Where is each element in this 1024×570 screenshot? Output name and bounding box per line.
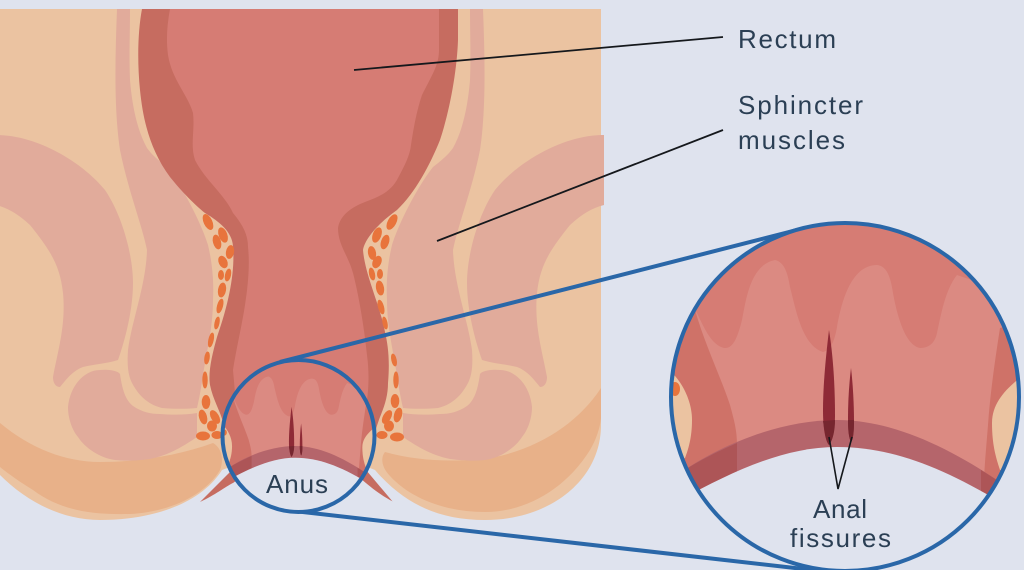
- tissue: peach base: [0, 9, 601, 520]
- tissue: lower left fold: [0, 423, 222, 514]
- large magnified circle: [660, 215, 1024, 570]
- rectum wall: [138, 9, 458, 502]
- fat cells left: [196, 213, 235, 440]
- label: Sphincter muscles: Sphincter: [738, 90, 863, 120]
- sphincter muscles left: [0, 9, 213, 461]
- label: Anal fissures: Anal: [813, 494, 867, 524]
- label: Sphincter muscles: [738, 90, 863, 155]
- zoom connector lines: [280, 228, 830, 570]
- rectum lumen: [167, 9, 439, 450]
- sphincter leader line: [437, 130, 723, 241]
- label: Sphincter muscles: muscles: [738, 125, 845, 155]
- anal opening outer wedge: [190, 478, 408, 530]
- sphincter muscles right: [387, 9, 604, 461]
- label: Anal fissures: fissures: [790, 523, 891, 553]
- tissue: lower right fold: [382, 388, 601, 512]
- rectum leader line: [354, 37, 723, 70]
- fat cells right: [367, 213, 404, 441]
- small magnifier circle: [218, 357, 379, 515]
- label: Rectum: Rectum: [738, 24, 836, 54]
- panel: body cross-section: [0, 9, 604, 520]
- label: Anal fissures: [790, 494, 891, 553]
- fissure pointer lines: [829, 437, 852, 489]
- label: Anus: Anus: [266, 469, 328, 499]
